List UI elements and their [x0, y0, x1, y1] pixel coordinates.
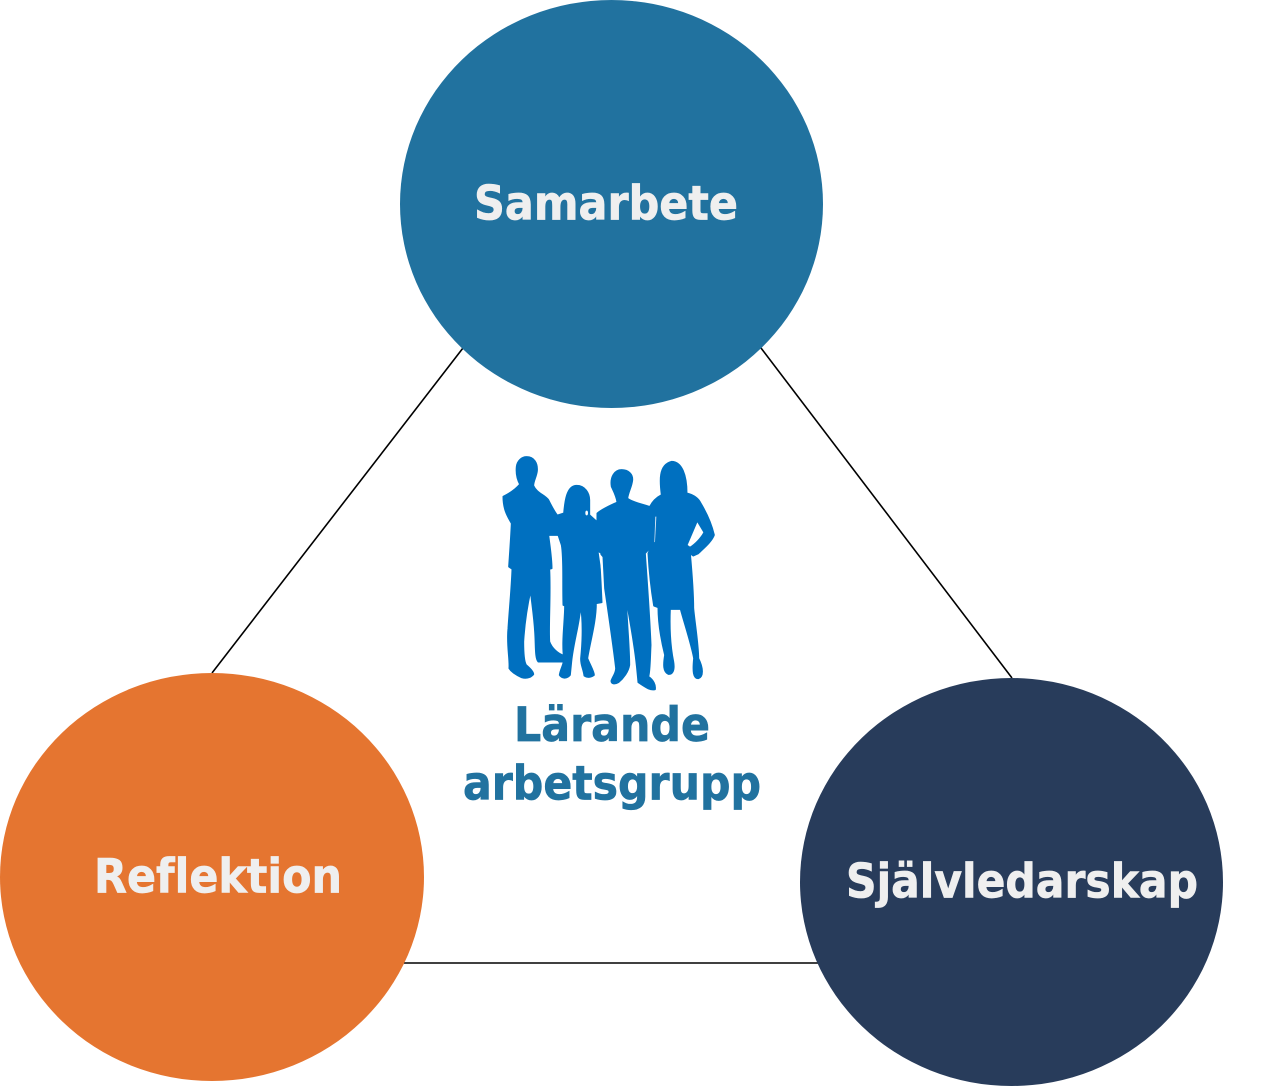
central label: Lärande arbetsgrupp: arbetsgrupp: [463, 756, 761, 812]
central label: Lärande arbetsgrupp: [463, 698, 761, 812]
central label: Lärande arbetsgrupp: Lärande: [514, 698, 710, 753]
circle: Reflektion: [0, 673, 424, 1081]
circle: Samarbete: Samarbete: [474, 176, 738, 232]
circle: Självledarskap: Självledarskap: [846, 854, 1198, 910]
circle: Självledarskap: [800, 678, 1223, 1086]
circle: Reflektion: Reflektion: [94, 850, 342, 904]
connecting lines between circles: [212, 348, 1012, 963]
icon: group of four people silhouette: [503, 457, 714, 690]
circle: Samarbete: [400, 0, 823, 408]
